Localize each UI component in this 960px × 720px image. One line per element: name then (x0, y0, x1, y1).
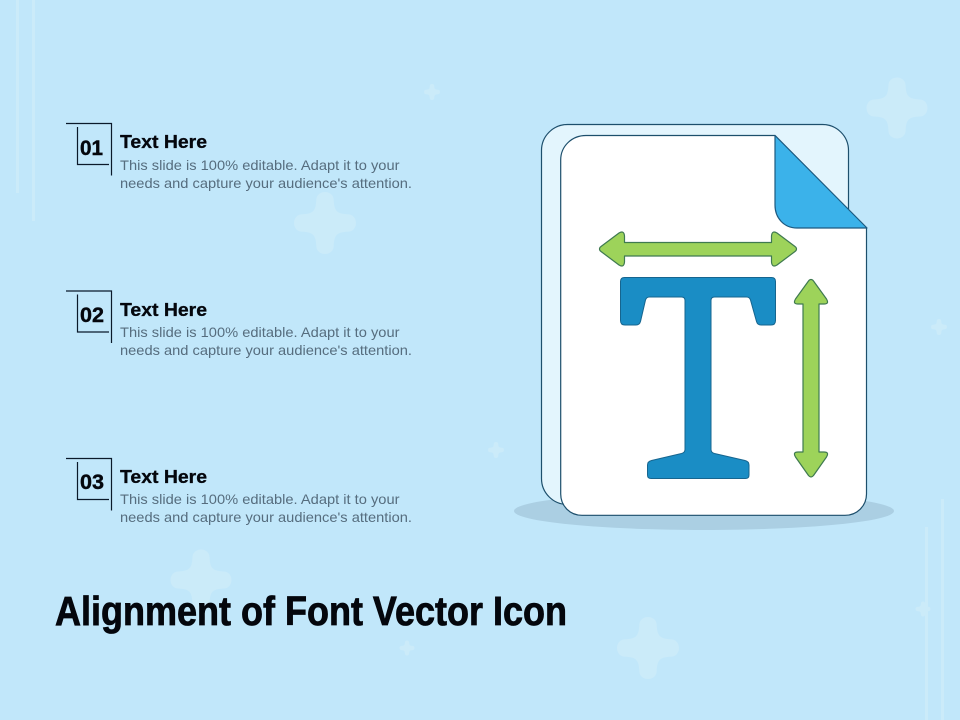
number badge 03 (66, 458, 112, 510)
folded corner (775, 136, 867, 228)
list item 02 (66, 291, 412, 358)
heading 03: Text Here (120, 467, 207, 487)
icon: document with font alignment (514, 124, 894, 530)
description 03: needs and capture your audience's attention. (120, 509, 412, 525)
description 01: This slide is 100% editable. Adapt it to your (120, 157, 400, 173)
list item 01 (66, 124, 412, 191)
number badge 02 (66, 291, 112, 343)
description 03 (120, 491, 412, 525)
number badge 01 (66, 124, 112, 176)
list item 03 (66, 458, 412, 525)
number badge 03: 03 (80, 471, 104, 494)
title: Alignment of Font Vector Icon (55, 588, 567, 634)
horizontal arrow (600, 232, 796, 266)
description 02 (120, 324, 412, 358)
number badge 01: 01 (80, 137, 103, 160)
heading 01: Text Here (120, 132, 207, 152)
description 03: This slide is 100% editable. Adapt it to your (120, 491, 400, 507)
front page (561, 136, 866, 515)
ground shadow (514, 492, 894, 530)
description 02: needs and capture your audience's attention. (120, 342, 412, 358)
description 02: This slide is 100% editable. Adapt it to your (120, 324, 400, 340)
vertical arrow (794, 280, 828, 477)
back page (542, 124, 848, 504)
heading 02: Text Here (120, 300, 207, 320)
description 01 (120, 157, 412, 191)
description 01: needs and capture your audience's attention. (120, 175, 412, 191)
number badge 02: 02 (80, 304, 104, 327)
letter T (620, 278, 776, 478)
